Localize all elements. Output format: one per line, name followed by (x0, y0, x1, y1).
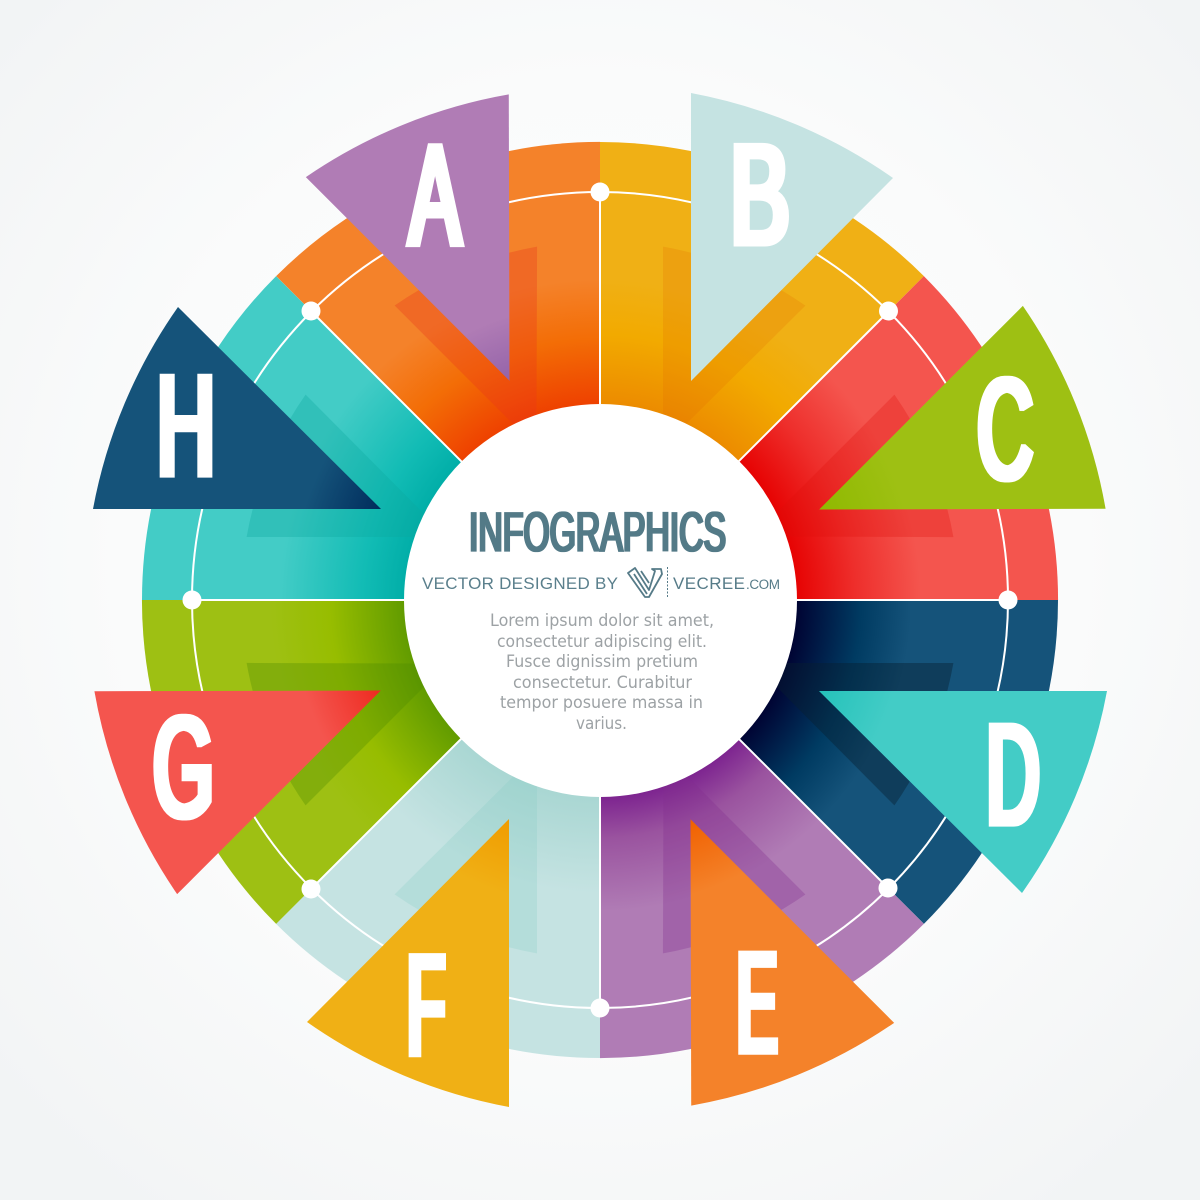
wheel segment: yellow (600, 142, 924, 600)
pointer B: B (730, 117, 790, 275)
body text: tempor posuere massa in (500, 693, 703, 712)
body text: consectetur. Curabitur (513, 673, 692, 692)
body text: Lorem ipsum dolor sit amet, (490, 611, 714, 630)
wheel segment: green (47, 371, 600, 924)
wheel segment: orange (276, 47, 829, 600)
pointer C: C (977, 351, 1033, 509)
title: INFOGRAPHICS (469, 500, 726, 563)
logo wordmark: VECREE (673, 574, 745, 593)
wheel segment: red (600, 276, 1153, 829)
body text: Fusce dignissim pretium (506, 652, 698, 671)
pointer F: F (407, 927, 445, 1085)
pointer B (691, 93, 893, 381)
pointer H (93, 307, 381, 509)
pointer G (34, 548, 381, 894)
wheel segment: pale blue (276, 600, 600, 1058)
white ring and spokes (192, 192, 1008, 1008)
logo domain: .COM (746, 577, 780, 592)
pointer A (306, 34, 652, 381)
body text (490, 611, 714, 733)
ring node dots (182, 182, 1018, 1018)
pointer D: D (986, 696, 1040, 854)
wheel segment: navy (600, 600, 1058, 924)
credit line: VECTOR DESIGNED BY (422, 574, 618, 593)
logo divider (666, 567, 668, 598)
pointer H: H (157, 347, 215, 505)
wheel segment: teal (142, 276, 600, 600)
center circle (404, 404, 797, 797)
pointer F (307, 819, 509, 1107)
pointer E (548, 819, 894, 1166)
pointer D (819, 691, 1107, 893)
pointer A: A (409, 117, 461, 275)
icon: logo V (628, 568, 662, 597)
pointer C (819, 306, 1166, 652)
body text: varius. (576, 714, 627, 733)
body text: consectetur adipiscing elit. (497, 632, 707, 651)
pointer E: E (737, 924, 777, 1083)
pointer G: G (153, 688, 214, 847)
wheel segment: purple (371, 600, 924, 1153)
